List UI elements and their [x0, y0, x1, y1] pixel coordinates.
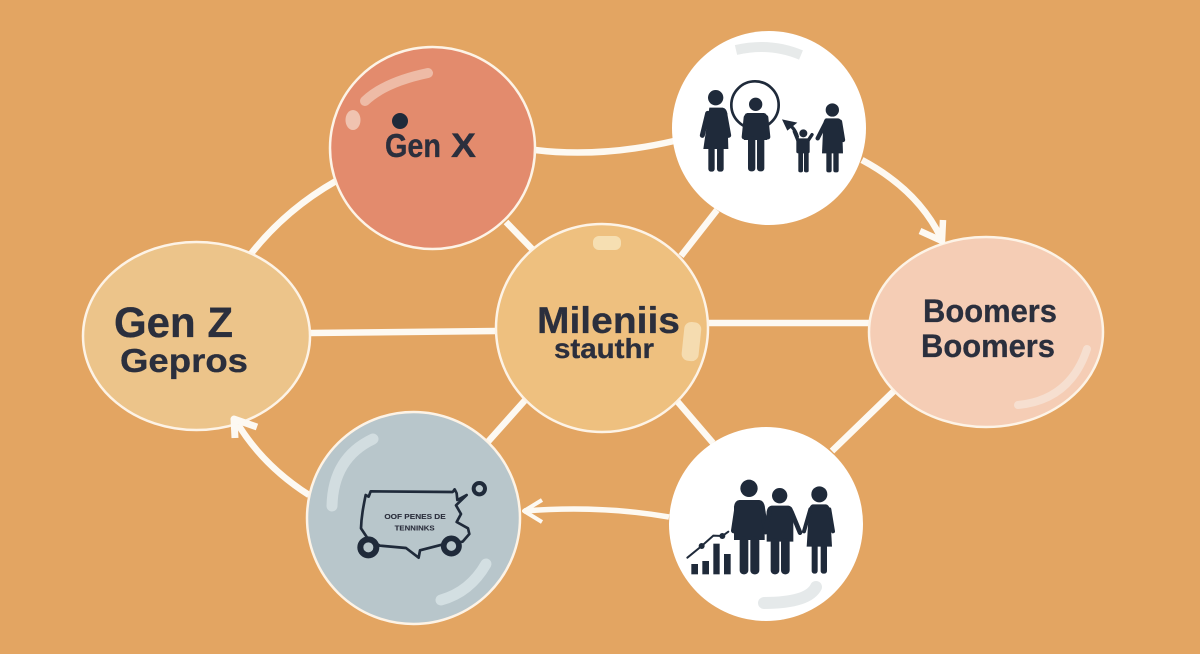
connector: Millennials to lower family [677, 401, 713, 443]
icon: family figures [702, 81, 843, 172]
bubble [669, 427, 863, 621]
highlight lower [441, 564, 486, 600]
node: Gen X [330, 47, 535, 249]
bar chart [687, 532, 731, 574]
bubble [672, 31, 866, 225]
figure: woman right [818, 103, 843, 172]
connectors and arrows [236, 141, 941, 522]
connector: Millennials to Boomers [707, 320, 870, 326]
label line 2: Boomers [921, 328, 1055, 364]
label line 2: Gepros [120, 342, 248, 379]
connector: Boomers to lower family [832, 389, 896, 451]
figure: man [744, 98, 768, 171]
figure: middle person [765, 488, 800, 574]
arrowhead: into Gen Z [234, 419, 257, 438]
highlight right [681, 321, 702, 362]
wheel left [360, 539, 376, 555]
arrow line: map to Gen Z [236, 421, 309, 495]
highlight dot [346, 110, 360, 130]
connector: Millennials to family [681, 210, 717, 256]
highlight upper [332, 439, 373, 506]
connector: Gen Z to Millennials [310, 331, 497, 333]
connector: Gen Z to Gen X [250, 181, 336, 255]
highlight [764, 587, 816, 603]
figure: woman [702, 90, 729, 172]
connector: Gen X to Millennials [506, 222, 534, 251]
bubble [307, 412, 520, 624]
bubble [330, 47, 535, 249]
figure: child [794, 129, 812, 172]
label: Gen [385, 127, 441, 164]
highlight [365, 73, 428, 101]
label line 1: Gen Z [114, 299, 233, 347]
node: map [307, 412, 520, 624]
bubble [83, 242, 310, 430]
small ring [474, 483, 485, 494]
highlight [736, 47, 801, 55]
icon: map outline with wheels [360, 483, 485, 558]
arrow line: family to Boomers [862, 160, 941, 238]
connector: Millennials to map [486, 398, 527, 444]
map outline [361, 489, 469, 558]
arrowhead: into Boomers [920, 220, 943, 241]
ring around man [731, 81, 779, 129]
map text line 1: OOF PENES DE [384, 512, 446, 521]
icon: people and bar chart [687, 480, 833, 574]
icon: dot [392, 113, 408, 129]
connector: Gen X to family [535, 141, 674, 153]
wheel right [444, 538, 459, 554]
highlight [1018, 349, 1087, 405]
node: Gen Z [83, 242, 310, 430]
figure: tall man [734, 480, 766, 574]
bubble [869, 237, 1103, 427]
label line 2: stauthr [554, 333, 654, 364]
arrow: lower family to map [524, 500, 669, 522]
label letter: X [451, 127, 476, 165]
label line 1: Boomers [923, 293, 1057, 329]
arrow: pointing up-left [782, 119, 797, 137]
node: Millennials [496, 224, 708, 432]
map text line 2: TENNINKS [395, 524, 435, 533]
label line 1: Mileniis [537, 300, 680, 341]
node: family icon [672, 31, 866, 225]
figure: woman [804, 486, 833, 574]
highlight top [593, 236, 621, 250]
bubble [496, 224, 708, 432]
node: Boomers [869, 237, 1103, 427]
node: family with chart [669, 427, 863, 621]
